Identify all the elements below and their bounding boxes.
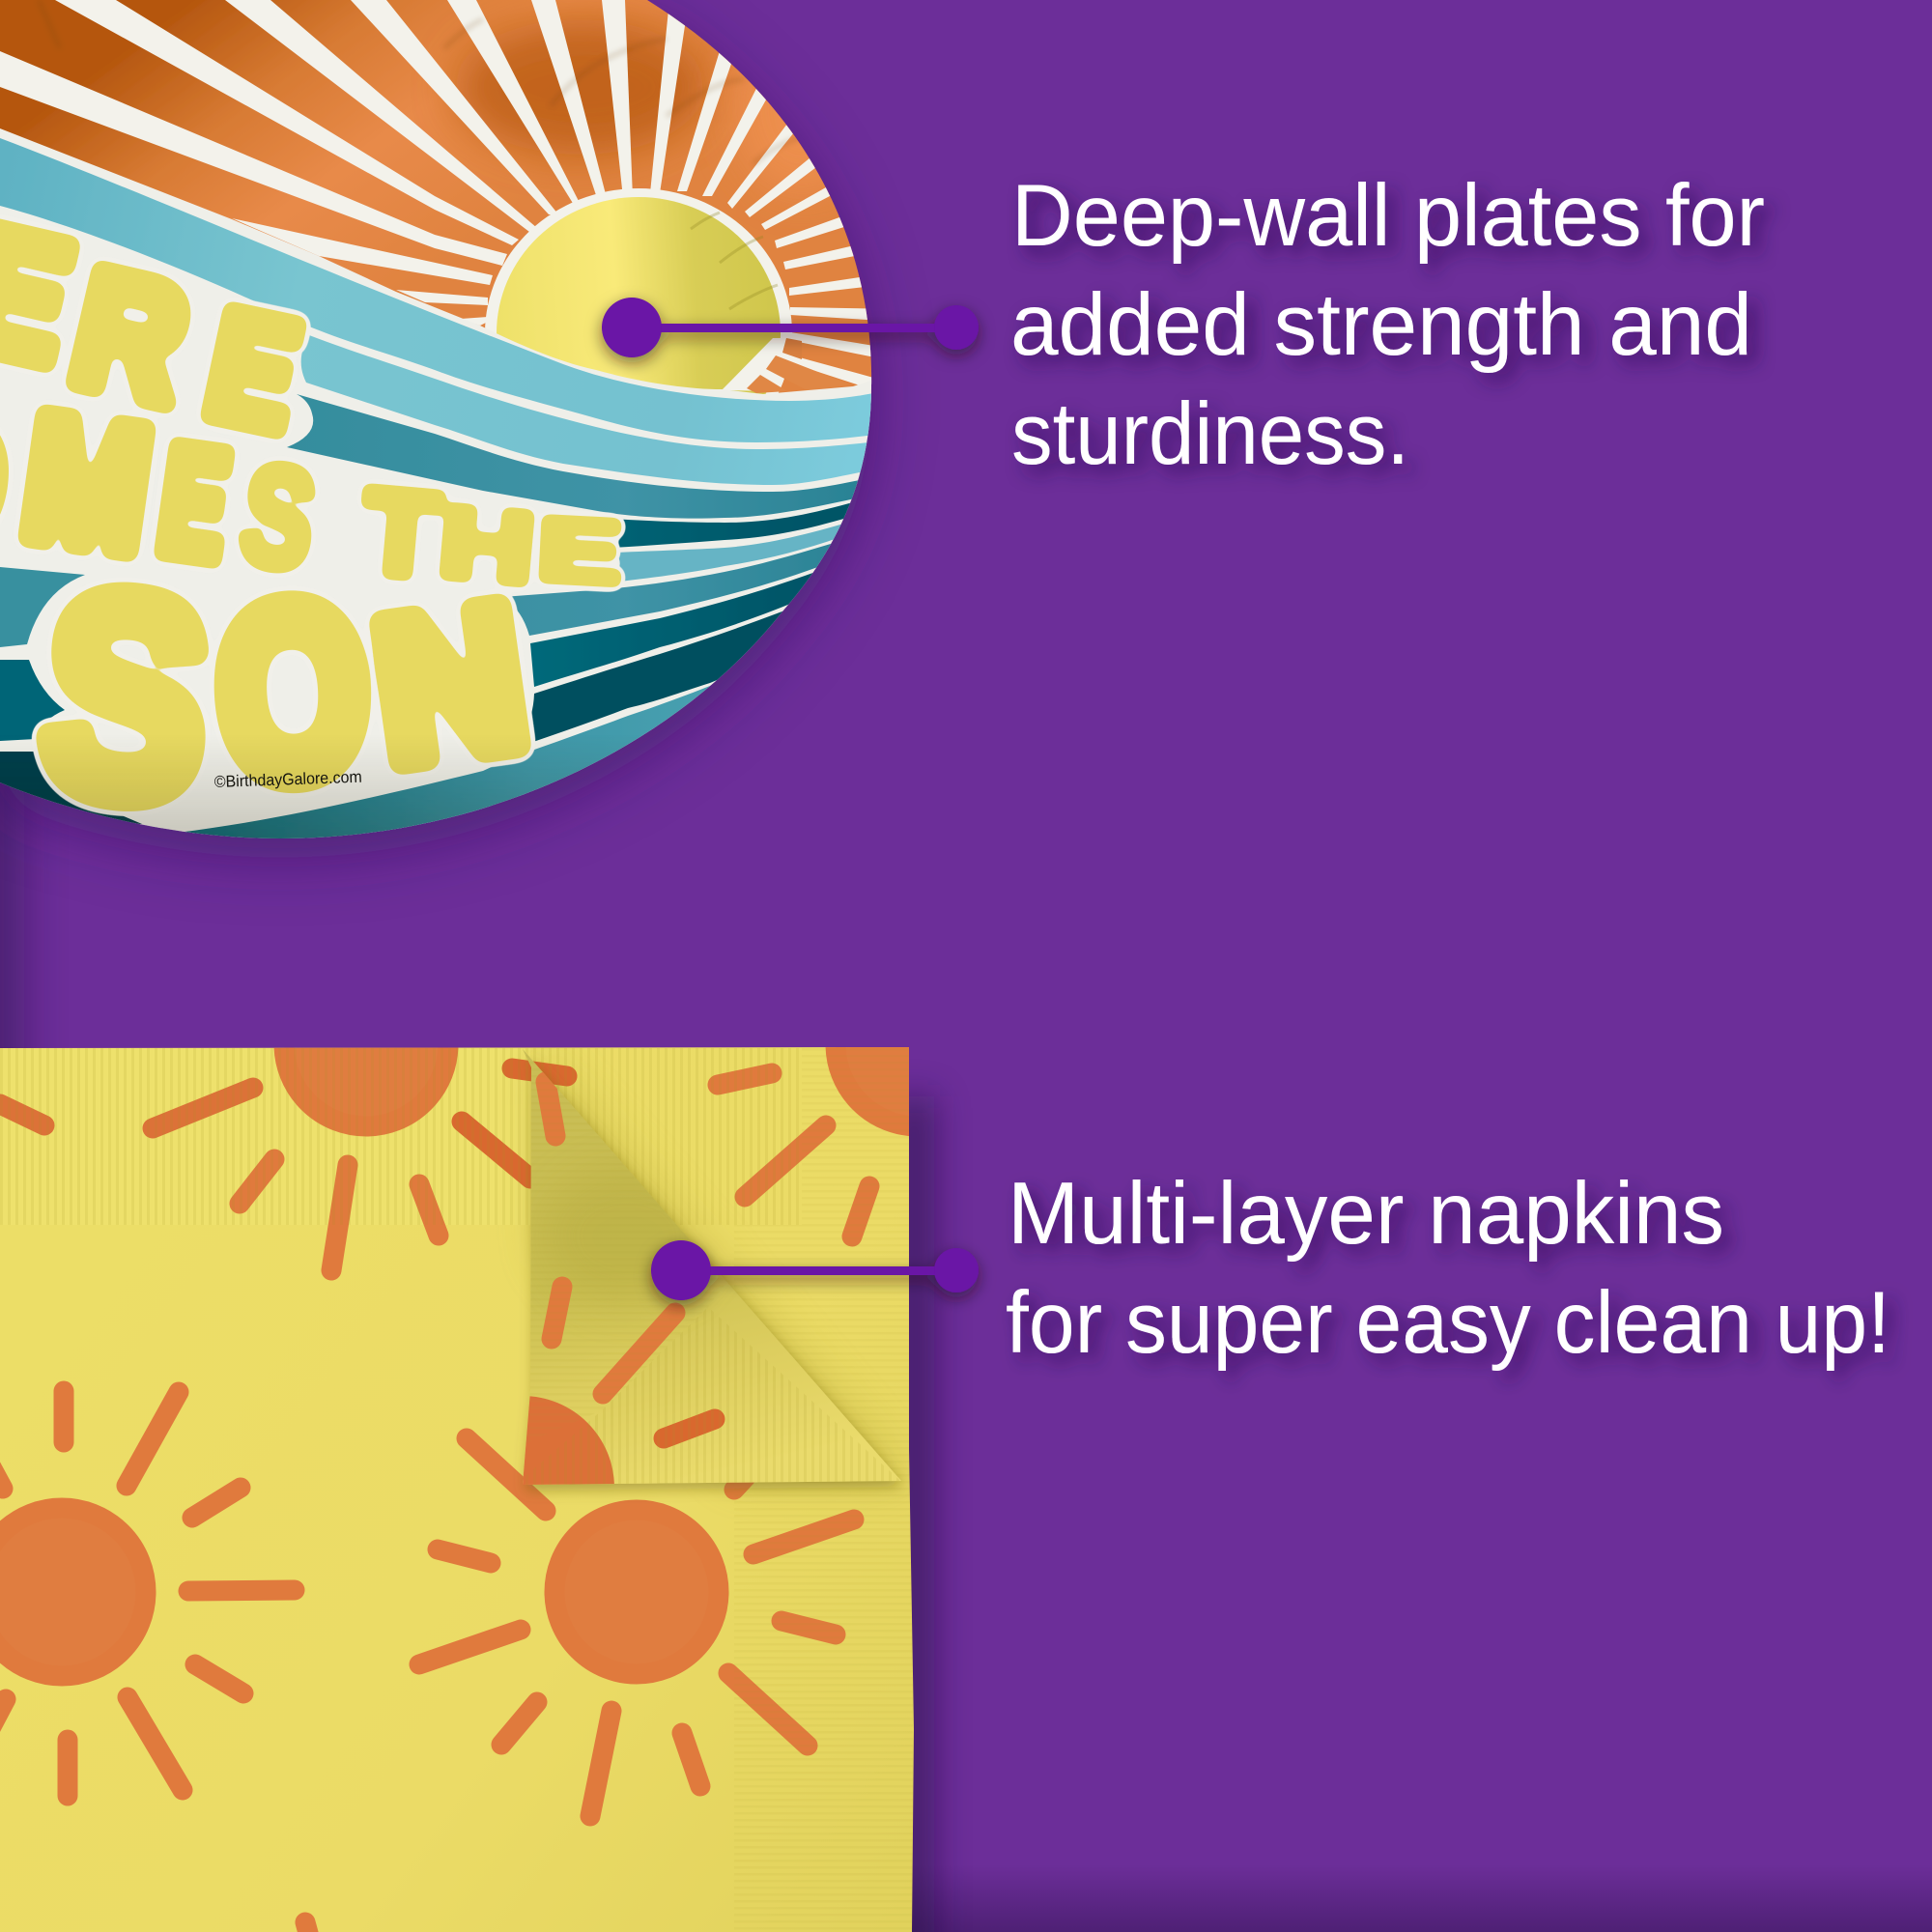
plate caption: sturdiness.: [1011, 385, 1409, 483]
vertical embossed ribs: [0, 1048, 802, 1225]
shadow right of napkin: [894, 1096, 934, 1932]
wave: light blue band two: [301, 335, 869, 485]
sun lower right: [419, 1438, 854, 1816]
plate bottom shading: [0, 734, 889, 850]
line: OMES THE: E: [150, 413, 239, 592]
line: SON: O: [213, 554, 373, 830]
wave: darkest band eight: [531, 611, 782, 742]
sun top right: [718, 962, 1000, 1236]
fold pattern: rays: [546, 1082, 715, 1438]
napkin caption: [1006, 1165, 1890, 1372]
line: OMES THE: E: [535, 499, 624, 602]
wave: teal band six: [502, 541, 840, 636]
line: OMES THE: H: [436, 487, 538, 605]
paper plate: [0, 0, 898, 869]
fold ribs: [512, 1043, 908, 1449]
wave: left dark piece: [0, 660, 65, 741]
leader start dot: [602, 298, 662, 357]
sun top left: [0, 962, 567, 1270]
dark fold patch: [541, 1169, 715, 1304]
leader end dot: [934, 305, 979, 350]
line: OMES THE: T: [358, 465, 443, 603]
horizontal embossed ribs: [734, 1048, 913, 1932]
line: OMES THE: M: [13, 377, 161, 589]
wave: teal band three: [287, 394, 869, 519]
copyright line: ©BirthdayGalore.com: [213, 768, 362, 791]
leader line: [632, 324, 956, 332]
bubble lettering: [0, 191, 624, 861]
line: SON: S: [32, 531, 219, 861]
wave: lower teal band: [185, 686, 711, 838]
white field below the waves: [0, 128, 898, 869]
line: OMES THE: [0, 377, 624, 605]
leader line: [681, 1266, 956, 1275]
folded corner: [431, 1043, 908, 1579]
sun: [485, 188, 819, 394]
line: OMES THE: S: [233, 435, 324, 600]
orange sunburst rays: [0, 0, 898, 406]
wave: left teal piece: [0, 567, 85, 647]
plate caption: [1010, 167, 1765, 483]
ray at bottom edge: [305, 1922, 311, 1932]
wave: light blue band one: [0, 138, 879, 442]
napkin: [0, 962, 1000, 1932]
line: SON: N: [363, 562, 537, 807]
wave: light band five: [618, 524, 840, 582]
background shading left: [0, 734, 24, 1121]
wave: left darkest piece: [0, 752, 142, 824]
plate caption: Deep-wall plates for: [1011, 167, 1765, 265]
line: ERE: [0, 191, 313, 463]
fold pattern: quarter sun: [431, 1396, 614, 1579]
callout: napkin leader: [651, 1240, 979, 1300]
napkin caption: for super easy clean up!: [1006, 1274, 1890, 1372]
napkin caption: Multi-layer napkins: [1008, 1165, 1724, 1263]
line: ERE: E: [194, 277, 313, 463]
line: ERE: R: [58, 235, 203, 439]
fold cast shadow on top layer: [541, 1053, 908, 1478]
napkin embossed top border: [0, 1048, 530, 1225]
plate creases: [39, 0, 821, 164]
line: SON: [32, 531, 537, 861]
leader end dot: [934, 1248, 979, 1293]
callout: plate leader: [602, 298, 979, 357]
sun lower left: [0, 1391, 295, 1796]
wave: dark teal band four: [618, 502, 850, 547]
wave: dark band seven: [530, 567, 829, 687]
plate caption: added strength and: [1010, 276, 1752, 374]
leader start dot: [651, 1240, 711, 1300]
background shading bottom: [0, 1864, 1932, 1932]
napkin base: [0, 1043, 918, 1932]
